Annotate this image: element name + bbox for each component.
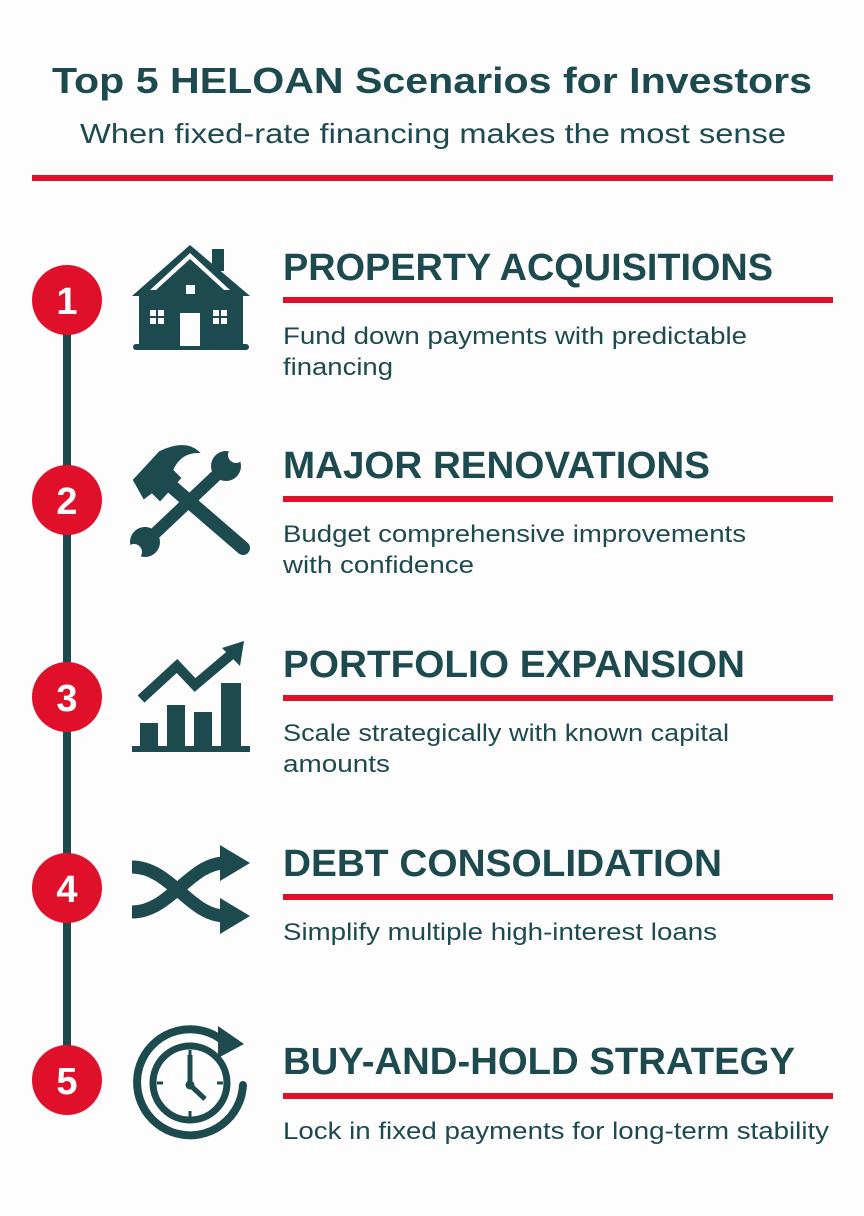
- heading: MAJOR RENOVATIONS: [283, 445, 710, 487]
- number badge 4: 4: [56, 869, 78, 911]
- description: with confidence: [282, 552, 474, 579]
- icon: house: [132, 245, 250, 350]
- number badge 3: 3: [56, 678, 78, 720]
- heading: DEBT CONSOLIDATION: [283, 843, 722, 885]
- icon: hammer and wrench: [126, 446, 244, 560]
- subtitle: When fixed-rate financing makes the most sense: [80, 118, 786, 149]
- heading: PROPERTY ACQUISITIONS: [283, 247, 773, 289]
- description: financing: [283, 354, 393, 381]
- description: Simplify multiple high-interest loans: [283, 919, 717, 946]
- step 2: [32, 445, 833, 579]
- number badge 5: 5: [56, 1061, 78, 1103]
- number badge 1: [32, 265, 102, 335]
- title: Top 5 HELOAN Scenarios for Investors: [52, 60, 812, 101]
- number badge 2: [32, 465, 102, 535]
- heading: BUY-AND-HOLD STRATEGY: [283, 1041, 795, 1083]
- step 4: [32, 843, 833, 946]
- icon: growth chart: [132, 641, 250, 752]
- number badge 4: [32, 853, 102, 923]
- description: Lock in fixed payments for long-term stability: [283, 1118, 829, 1145]
- icon: clock with arrow: [137, 1026, 244, 1135]
- step 5: [32, 1026, 833, 1145]
- timeline line: [63, 300, 71, 1080]
- description: Scale strategically with known capital: [283, 720, 729, 747]
- description: Fund down payments with predictable: [283, 323, 747, 350]
- number badge 1: 1: [56, 281, 78, 323]
- icon: shuffle arrows: [132, 845, 250, 934]
- number badge 3: [32, 662, 102, 732]
- step 3: [32, 641, 833, 778]
- description: amounts: [283, 751, 390, 778]
- step 1: [32, 245, 833, 381]
- number badge 5: [32, 1045, 102, 1115]
- heading: PORTFOLIO EXPANSION: [283, 644, 745, 686]
- description: Budget comprehensive improvements: [283, 521, 746, 548]
- number badge 2: 2: [56, 481, 78, 523]
